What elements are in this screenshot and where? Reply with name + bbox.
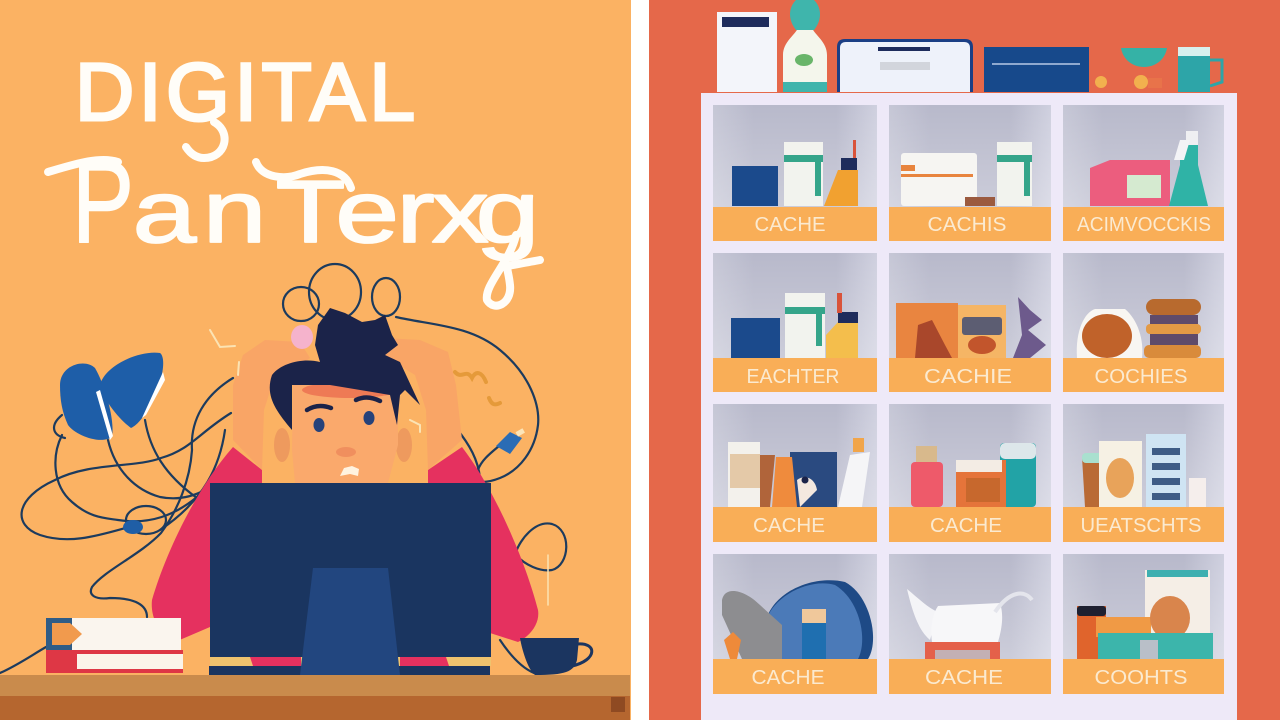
label bbox=[889, 507, 1051, 542]
cell: row 1 column 1 bbox=[713, 105, 877, 241]
hand highlight bbox=[291, 325, 313, 349]
monitor screen bbox=[210, 483, 491, 657]
label bbox=[1063, 207, 1224, 241]
label: CACHE bbox=[925, 667, 1003, 689]
shelf unit bbox=[701, 93, 1237, 720]
cell background bbox=[889, 404, 1051, 507]
top shelf items bbox=[717, 0, 1222, 92]
coffee mug bbox=[520, 638, 592, 675]
cell background bbox=[713, 404, 877, 507]
label bbox=[713, 358, 877, 392]
title flourishes bbox=[48, 122, 540, 306]
bottom book panel bbox=[77, 654, 183, 669]
label bbox=[889, 358, 1051, 392]
handwritten title letters: n bbox=[203, 163, 266, 261]
cell background bbox=[713, 253, 877, 358]
handwritten title letters: x bbox=[432, 163, 489, 261]
icon: blue plug connector bbox=[496, 428, 525, 454]
nose bbox=[336, 447, 356, 457]
label bbox=[1063, 358, 1224, 392]
items bbox=[907, 589, 1032, 659]
sparks and doodles bbox=[210, 330, 548, 605]
cell: row 2 column 2 bbox=[889, 253, 1051, 392]
label: CACHE bbox=[752, 667, 824, 689]
handwritten title letters: a bbox=[133, 163, 196, 261]
cell: row 4 column 1 bbox=[713, 554, 877, 694]
bottom book bbox=[46, 650, 183, 673]
face bbox=[292, 383, 398, 483]
desk bbox=[0, 675, 630, 720]
title: Digital Pantery bbox=[48, 47, 540, 306]
cell: row 2 column 1 bbox=[713, 253, 877, 392]
cell background bbox=[1063, 253, 1224, 358]
icon: small cable connector bbox=[123, 520, 143, 534]
cables: tangled left bbox=[0, 378, 233, 673]
illustration: stressed person at computer bbox=[0, 264, 630, 720]
monitor base bbox=[209, 666, 490, 675]
panel: right coral background bbox=[649, 0, 1280, 720]
label: CACHE bbox=[753, 515, 825, 537]
label bbox=[889, 207, 1051, 241]
cell: row 4 column 3 bbox=[1063, 554, 1224, 694]
cell background bbox=[713, 554, 877, 659]
desk items under screen bbox=[210, 657, 491, 666]
cell background bbox=[713, 105, 877, 207]
label bbox=[889, 659, 1051, 694]
cell: row 1 column 3 bbox=[1063, 105, 1224, 241]
label: EACHTER bbox=[746, 366, 840, 388]
item: tablet bbox=[837, 39, 973, 92]
label bbox=[1063, 659, 1224, 694]
items bbox=[1077, 299, 1201, 358]
cell: row 3 column 1 bbox=[713, 404, 877, 542]
label: UEATSCHTS bbox=[1080, 515, 1202, 537]
handwritten initial P: P bbox=[72, 136, 134, 268]
item: bottle bbox=[783, 0, 827, 92]
label: CACHIE bbox=[924, 366, 1012, 388]
handwritten title letters: r bbox=[396, 163, 435, 261]
item: teal bowl bbox=[1121, 48, 1167, 67]
cell: row 3 column 3 bbox=[1063, 404, 1224, 542]
label: CACHE bbox=[754, 214, 826, 236]
eyes bbox=[314, 411, 374, 432]
icon: blue headphones bbox=[60, 353, 165, 440]
items bbox=[722, 580, 873, 659]
forehead flush bbox=[302, 382, 398, 398]
label bbox=[713, 659, 877, 694]
arm: right bbox=[378, 338, 462, 470]
cell background bbox=[889, 554, 1051, 659]
handwritten title letters: g bbox=[476, 163, 539, 261]
sweater: left sleeve bbox=[152, 447, 262, 642]
label bbox=[1063, 507, 1224, 542]
top book spine bbox=[46, 618, 72, 650]
items bbox=[901, 142, 1032, 206]
sweater: right sleeve bbox=[428, 447, 538, 642]
cables: right side bbox=[396, 317, 566, 673]
cell background bbox=[889, 105, 1051, 207]
sweater under screen bbox=[250, 657, 449, 666]
label bbox=[713, 207, 877, 241]
cell background bbox=[1063, 554, 1224, 659]
items bbox=[731, 293, 858, 358]
monitor stand bbox=[300, 568, 400, 675]
items bbox=[896, 297, 1046, 358]
hair bbox=[270, 308, 420, 430]
top book bbox=[46, 618, 181, 650]
label: ACIMVOCCKIS bbox=[1077, 214, 1211, 236]
item: white box bbox=[717, 12, 777, 92]
cell: row 2 column 3 bbox=[1063, 253, 1224, 392]
label: COCHIES bbox=[1094, 366, 1188, 388]
shelf frame bbox=[701, 93, 1237, 720]
cell: row 4 column 2 bbox=[889, 554, 1051, 694]
arm: left bbox=[233, 340, 310, 470]
items bbox=[1077, 570, 1213, 659]
item: teal mug bbox=[1178, 47, 1222, 92]
label: CACHIS bbox=[928, 214, 1006, 236]
ear: right bbox=[396, 428, 412, 462]
eyebrows bbox=[307, 397, 380, 410]
divider: white gap bbox=[631, 0, 649, 720]
item: laptop bbox=[984, 47, 1089, 92]
items bbox=[1090, 131, 1208, 206]
doodle: orange scribbles bbox=[455, 372, 500, 404]
books bbox=[46, 618, 183, 673]
cables: loops above head bbox=[283, 264, 400, 321]
label: COOHTS bbox=[1094, 667, 1188, 689]
panel: left orange background bbox=[0, 0, 631, 720]
cell background bbox=[1063, 105, 1224, 207]
items bbox=[732, 140, 858, 206]
cell: row 3 column 2 bbox=[889, 404, 1051, 542]
handwritten title letters: e bbox=[335, 163, 399, 261]
cell background bbox=[889, 253, 1051, 358]
handwritten title letters: T bbox=[276, 163, 345, 261]
label bbox=[713, 507, 877, 542]
label: CACHE bbox=[930, 515, 1002, 537]
monitor bbox=[209, 483, 491, 675]
items bbox=[1082, 434, 1206, 507]
mouth bbox=[340, 466, 359, 476]
item: snacks bbox=[1095, 75, 1162, 89]
title line: DIGITAL: DIGITAL bbox=[75, 47, 415, 138]
items bbox=[911, 443, 1036, 507]
ear: left bbox=[274, 428, 290, 462]
cell: row 1 column 2 bbox=[889, 105, 1051, 241]
cell background bbox=[1063, 404, 1224, 507]
items bbox=[728, 438, 870, 507]
top book orange tab bbox=[52, 623, 82, 645]
